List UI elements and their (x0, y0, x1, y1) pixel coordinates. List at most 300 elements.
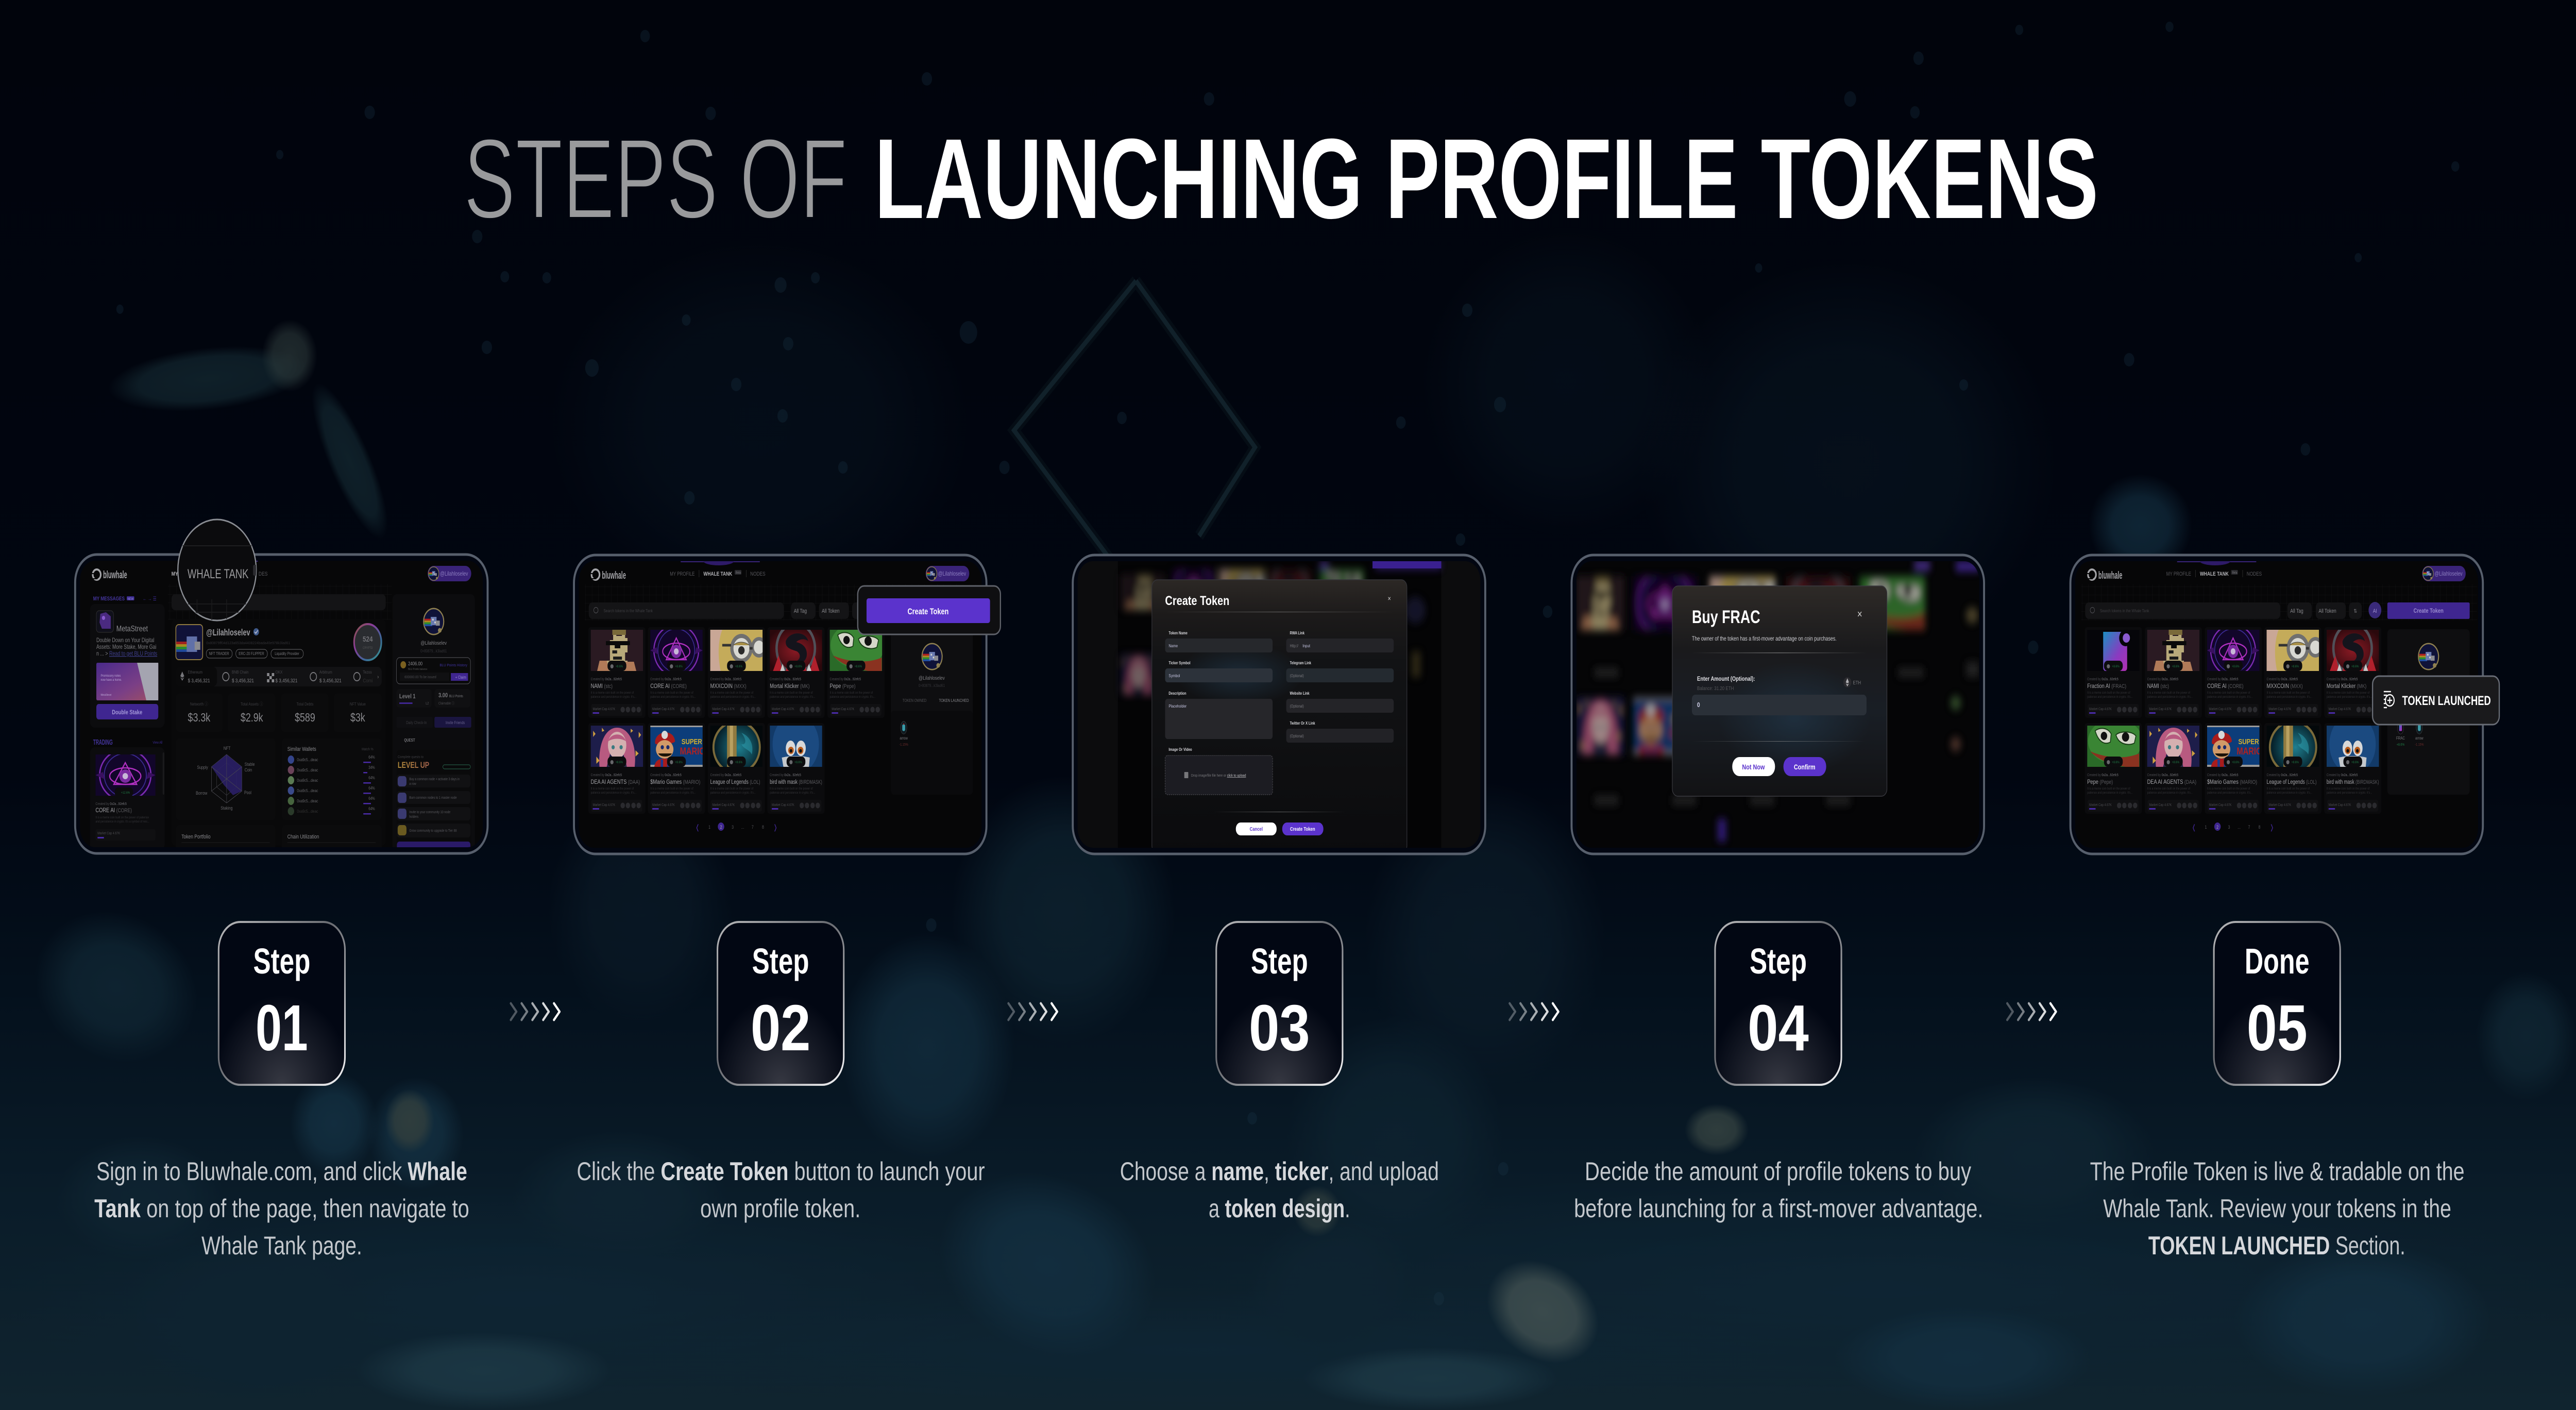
token cards: Created by 0x2a...92efc5 (2147, 677, 2179, 681)
token cards: patience and persistence in crypto. It's... (2207, 792, 2253, 795)
similar wallets list: 64% (368, 755, 375, 760)
token cards: Created by 0x2a...92efc5 (591, 677, 622, 681)
stat cards: Total Assets ⓘ (241, 701, 263, 707)
panel: step 4 screenshot (1571, 555, 1984, 854)
token cards: +8.6% (2172, 761, 2179, 764)
token cards: Market Cap 4.67K (832, 707, 855, 711)
right profile column: Daily Check-In (406, 720, 427, 725)
radar chart: Staking (221, 805, 233, 811)
token cards: It is a meme coin built on the power of (710, 692, 753, 695)
panel: step 3 screenshot (1073, 555, 1485, 854)
text: step 5 description: TOKEN LAUNCHED Section. (2148, 1231, 2405, 1260)
step badge 01 (218, 922, 345, 1085)
text: step 4 description: before launching for a first-mover advantage. (1574, 1194, 1983, 1223)
chain strip: $ 3,456,321 (188, 677, 210, 683)
messages sidebar: n ... > Read to get BLU Points (96, 651, 157, 657)
Create Token modal: Twitter Or X Link (1290, 721, 1315, 726)
token cards: +8.6% (2172, 665, 2179, 668)
profile pill: @Lilahloselev (2434, 571, 2463, 577)
right profile column: 0×80879...k3lad61 (420, 649, 447, 653)
portfolio and chain cards: Token Portfolio (181, 834, 211, 840)
navigation: MY PROFILE (670, 571, 695, 577)
radar chart: Coin (245, 767, 252, 773)
token cards: It is a meme coin built on the power of (2147, 787, 2190, 791)
profile card: @Lilahloselev (206, 627, 250, 637)
Create Token modal: Create Token (1165, 594, 1229, 608)
messages sidebar: Double Stake (112, 709, 142, 716)
token cards: It is a meme coin built on the power of (2147, 692, 2190, 695)
token cards: +8.6% (735, 761, 742, 764)
token cards: Market Cap 4.67K (2329, 803, 2351, 807)
token cards: patience and persistence in crypto. It's... (710, 792, 756, 795)
Buy FRAC modal: ETH (1853, 680, 1861, 685)
right profile column: Invite to your community 10 node (409, 810, 451, 814)
text: step 5 description (2090, 1157, 2465, 1260)
pagination: 3 (2228, 825, 2230, 830)
token cards: +8.6% (2232, 761, 2239, 764)
pagination: 1 (2205, 825, 2207, 830)
callout: Create Token button: Create Token (907, 607, 948, 616)
profile card: 0x80879ff04d123a653da4408224bada40e978k3lad61 (206, 641, 291, 645)
right profile column: 3.00 BLU Points (438, 692, 463, 699)
Create Token modal: Placeholder (1168, 703, 1187, 709)
Create Token modal: Input (1302, 643, 1311, 648)
right profile column: 2406.00 (408, 661, 422, 666)
token cards: Market Cap 4.67K (772, 707, 794, 711)
Create Token modal (1152, 580, 1407, 853)
stat cards: $2.9k (241, 711, 263, 725)
token cards: It is a meme coin built on the power of (770, 692, 813, 695)
step badge 01: Step (253, 941, 310, 982)
text: step 1 description: Sign in to Bluwhale.com, and click Whale (96, 1157, 467, 1186)
messages sidebar (90, 596, 165, 850)
messages sidebar: NEW (127, 598, 134, 601)
pagination (695, 822, 778, 832)
Create Token modal: Website Link (1290, 691, 1310, 696)
token cards: It is a meme coin built on the power of (2267, 692, 2310, 695)
token cards: League of Legends (LOL) (2267, 779, 2317, 785)
stat cards: $3k (350, 711, 365, 725)
Create Token modal: Token Name (1168, 631, 1188, 635)
token cards: It is a meme coin built on the power of (650, 692, 693, 695)
Create Token modal: Create Token (1290, 826, 1315, 832)
token cards: +8.6% (675, 665, 683, 668)
token cards: patience and persistence in crypto. It's... (2267, 696, 2312, 699)
token cards: Market Cap 4.67K (712, 707, 735, 711)
right profile column: 600000.00 To be issued (404, 675, 436, 679)
similar wallets list (282, 738, 382, 820)
token cards: +8.6% (616, 665, 623, 668)
diamond outline (1014, 281, 1255, 588)
step badge 02 (718, 922, 844, 1085)
token cards: Created by 0x2a...92efc5 (2267, 677, 2298, 681)
token cards: Created by 0x2a...92efc5 (830, 677, 861, 681)
step badge 05 done: 05 (2247, 992, 2308, 1064)
messages sidebar: Assets: More Stake, More Gai (96, 644, 156, 650)
pagination: 7 (2248, 825, 2250, 830)
radar chart: NFT (224, 746, 230, 751)
text: step 5 description: Whale Tank. Review your tokens in the (2103, 1194, 2451, 1223)
token cards: It is a meme coin built on the power of (710, 787, 753, 791)
chain strip: › (377, 674, 379, 680)
pagination: ❬ (695, 824, 700, 832)
pagination (2192, 822, 2274, 832)
token cards: +8.6% (2351, 761, 2359, 764)
stat cards: $589 (295, 711, 315, 725)
token cards (588, 623, 885, 814)
arrow: step 1 to 2 (511, 1003, 560, 1020)
similar wallets list: 64% (368, 786, 375, 791)
pagination: ❭ (773, 824, 778, 832)
navigation: Beta (2232, 572, 2237, 575)
token cards: Market Cap 4.67K (2329, 707, 2351, 711)
Buy FRAC modal: 0 (1697, 701, 1700, 709)
pagination: 3 (732, 825, 734, 830)
token cards: patience and persistence in crypto. It's... (591, 696, 636, 699)
Buy FRAC modal: Enter Amount (Optional): (1697, 676, 1755, 682)
token cards: patience and persistence in crypto. It's... (2147, 792, 2193, 795)
step badge 03 (1216, 922, 1343, 1085)
token cards: DEA AI AGENTS (DAA) (591, 779, 640, 785)
title: STEPS OF (464, 115, 848, 242)
navigation: NODES (750, 571, 766, 577)
Create Token modal: Image Or Video (1168, 747, 1192, 752)
similar wallets list: 0xa9c5...deac (297, 798, 318, 803)
chain strip: Tezos (363, 669, 372, 675)
profile pill (926, 566, 969, 581)
token cards: It is a meme coin built on the power of (2207, 787, 2250, 791)
step badge 02: Step (752, 941, 809, 982)
text: step 1 description: Tank on top of the page, then navigate to (94, 1194, 469, 1223)
token cards: +8.6% (855, 665, 862, 668)
token cards: +8.6% (2112, 665, 2120, 668)
Create Token modal: Name (1168, 643, 1178, 648)
profile card (172, 619, 386, 851)
blurred background screen (1577, 561, 1980, 842)
messages sidebar: MY MESSAGES (93, 596, 125, 602)
similar wallets list: 64% (368, 807, 375, 811)
token cards: Created by 0x2a...92efc5 (770, 677, 801, 681)
token cards: Created by 0x2a...92efc5 (650, 773, 682, 777)
bluwhale logo: bluwhale (2098, 569, 2123, 581)
token cards: It is a meme coin built on the power of (2327, 787, 2370, 791)
text: step 3 description: a token design. (1209, 1194, 1350, 1223)
navigation: WHALE TANK (2200, 571, 2229, 577)
Create Token modal: (Optional) (1290, 734, 1304, 738)
text: step 3 description: Choose a name, ticker, and upload (1120, 1157, 1439, 1186)
text: step 1 description: Whale Tank page. (201, 1231, 362, 1260)
radar chart: Borrow (196, 791, 207, 796)
profile card: Liquidity Provider (275, 651, 299, 656)
profile card: NFT TRADER (209, 651, 229, 656)
title: LAUNCHING PROFILE TOKENS (874, 115, 2098, 242)
Create Token modal: RWA Link (1290, 631, 1304, 635)
pagination: 2 (2216, 825, 2219, 830)
token cards: patience and persistence in crypto. It's... (770, 696, 816, 699)
text: step 2 description (577, 1157, 985, 1223)
token cards: Market Cap 4.67K (2209, 803, 2232, 807)
pagination: ... (2238, 825, 2241, 830)
bluwhale logo (591, 569, 626, 581)
bluwhale logo (2087, 569, 2123, 581)
arrow: step 2 to 3 (1008, 1003, 1057, 1020)
token cards (2085, 624, 2381, 814)
similar wallets list: 64% (368, 776, 375, 780)
Buy FRAC modal: Not Now (1742, 763, 1765, 771)
token cards: CORE AI (CORE) (650, 683, 687, 690)
token cards: Created by 0x2a...92efc5 (710, 677, 742, 681)
text: step 2 description: Click the Create Token button to launch your (577, 1157, 985, 1186)
token cards: +8.6% (794, 665, 802, 668)
token cards: Mortal Klicker (MK) (770, 683, 810, 690)
navigation (670, 570, 766, 577)
bluwhale logo (92, 569, 127, 580)
search and filters: All Tag (794, 608, 807, 614)
chain strip: $ 3,456,321 (319, 677, 342, 683)
token cards: patience and persistence in crypto. It's... (2087, 792, 2133, 795)
token cards: Created by 0x2a...92efc5 (650, 677, 682, 681)
text: step 2 description: own profile token. (700, 1194, 860, 1223)
token cards: Market Cap 4.67K (2149, 803, 2172, 807)
token cards: It is a meme coin built on the power of (2087, 692, 2130, 695)
search and filters: Search tokens in the Whale Tank (2100, 608, 2149, 613)
Create Token modal: Drop image/file file here or click to upload (1191, 774, 1246, 778)
search and filters: All Token (822, 608, 839, 614)
similar wallets list: 64% (368, 796, 375, 801)
chain strip: Comi (363, 677, 372, 683)
sidebar: TOKEN OWNED (903, 698, 926, 703)
right profile column: @Lilahloselev (420, 640, 447, 646)
right profile column: Burn common nodes to 1 master node (409, 796, 457, 800)
token cards: Created by 0x2a...92efc5 (2327, 773, 2358, 777)
token cards: Created by 0x2a...92efc5 (2087, 773, 2119, 777)
token cards: Created by 0x2a...92efc5 (710, 773, 742, 777)
token cards: bird with mask (BIRDMASK) (2327, 779, 2379, 785)
right profile column: Complete quests to (398, 755, 423, 759)
token cards: Created by 0x2a...92efc5 (2207, 773, 2239, 777)
callout: Create Token button (858, 586, 1001, 634)
similar wallets list: Similar Wallets (287, 746, 316, 752)
panel: step 5 screenshot (2071, 555, 2499, 854)
rank badge: 524 (363, 635, 373, 643)
step badge 01: 01 (256, 992, 308, 1064)
Create Token modal: Cancel (1250, 826, 1263, 832)
similar wallets list: 0xa9c5...deac (297, 767, 318, 773)
token cards: +8.6% (2112, 761, 2120, 764)
chain strip: BNB Chain (232, 669, 249, 675)
Create Token modal: Ticker Symbol (1168, 661, 1191, 665)
pagination: ... (741, 825, 744, 830)
search and filters: All Token (2318, 608, 2336, 614)
pagination: 1 (708, 825, 710, 830)
token cards: It is a meme coin built on the power of (2327, 692, 2370, 695)
sidebar: -1.15% (2415, 743, 2424, 747)
token cards: DEA AI AGENTS (DAA) (2147, 779, 2196, 785)
step badge 04: Step (1750, 941, 1807, 982)
text: step 3 description (1120, 1157, 1439, 1223)
stat cards: $3.3k (188, 711, 211, 725)
token cards: +8.6% (2292, 665, 2299, 668)
text: step 4 description (1574, 1157, 1983, 1223)
arrow: step 3 to 4 (1510, 1003, 1558, 1020)
messages sidebar: MetaStreet (101, 694, 112, 697)
similar wallets list: 0xa9c5...deac (297, 778, 318, 783)
token cards: Market Cap 4.67K (772, 803, 794, 807)
magnifier on Whale Tank nav item: WHALE TANK (188, 567, 249, 581)
panel: step 2 screenshot (574, 555, 1001, 854)
callout: Token Launched tab (2372, 676, 2499, 725)
token cards: patience and persistence in crypto. It's... (2087, 696, 2133, 699)
pagination: 2 (720, 825, 722, 830)
callout: Token Launched tab: TOKEN LAUNCHED (2402, 694, 2491, 708)
Create Token button (2387, 602, 2470, 619)
sidebar: 0×80879...k3lad61 (919, 683, 945, 688)
Buy FRAC modal (1672, 586, 1887, 796)
messages sidebar: View All (152, 741, 162, 745)
token cards: Market Cap 4.67K (593, 707, 616, 711)
token cards: It is a meme coin built on the power of (830, 692, 873, 695)
profile pill (2422, 566, 2466, 581)
Create Token modal: × (1387, 595, 1391, 602)
token cards: Market Cap 4.67K (2268, 803, 2292, 807)
step badge 04: 04 (1748, 992, 1809, 1064)
search and filters: All Tag (2290, 608, 2303, 614)
token cards: Created by 0x2a...92efc5 (770, 773, 801, 777)
sidebar: FRAC (2396, 736, 2405, 741)
rank badge: CRYPTO (363, 647, 372, 650)
profile pill (428, 566, 471, 581)
token cards: NAMI (stc) (591, 683, 613, 690)
navigation: MY PROFILE (2166, 571, 2191, 577)
sidebar: +8.6% (2397, 743, 2405, 747)
token cards: $Mario Games (MARIO) (650, 779, 700, 785)
chain strip: Ethereum (188, 669, 202, 675)
messages sidebar: It is a meme coin built on the power of patience (95, 816, 149, 819)
right profile column (393, 594, 475, 852)
messages sidebar: and persistence in crypto. It's a symbol of resi... (95, 820, 149, 824)
step badge 04 (1715, 922, 1841, 1085)
sidebar (891, 626, 973, 795)
similar wallets list: Match % (362, 747, 374, 751)
right profile column: Invite Friends (446, 720, 465, 725)
token cards: Pepe (Pepe) (2087, 779, 2113, 785)
messages sidebar: CORE AI (CORE) (95, 807, 132, 814)
Buy FRAC modal: Balance: 31.20 ETH (1697, 685, 1734, 691)
chain strip: $ 3,456,321 (232, 677, 254, 683)
token cards: Market Cap 4.67K (2089, 803, 2112, 807)
token cards: Created by 0x2a...92efc5 (591, 773, 622, 777)
token cards: MXXCOIN (MXX) (2267, 683, 2303, 690)
token cards: It is a meme coin built on the power of (2267, 787, 2310, 791)
right profile column: Buy a common node + activate 3 days in (409, 777, 460, 781)
right profile column: a row (409, 782, 416, 786)
token cards: +8.6% (735, 665, 742, 668)
token cards: Created by 0x2a...92efc5 (2207, 677, 2239, 681)
token cards: It is a meme coin built on the power of (2207, 692, 2250, 695)
right profile column: QUEST (404, 738, 415, 743)
token cards: patience and persistence in crypto. It's... (2327, 792, 2372, 795)
sidebar: -1.15% (899, 743, 908, 747)
profile pill: @Lilahloselev (440, 571, 468, 577)
text: step 1 description (94, 1157, 469, 1260)
stat cards: Total Debts (296, 701, 314, 707)
sidebar: @Lilahloselev (919, 675, 945, 681)
pagination: 7 (752, 825, 754, 830)
messages sidebar: Double Down on Your Digital (96, 637, 154, 644)
chain strip: $ 3,456,321 (276, 677, 297, 683)
messages sidebar: Promissory notes (101, 675, 121, 678)
messages sidebar: +12.6% (121, 792, 130, 795)
token cards: It is a meme coin built on the power of (2087, 787, 2130, 791)
right profile column: BLU Points History (439, 663, 468, 667)
pagination: ❬ (2192, 824, 2196, 832)
text: step 5 description: The Profile Token is live & tradable on the (2090, 1157, 2465, 1186)
navigation: Beta (736, 572, 741, 575)
chain strip (176, 667, 382, 686)
profile card: ERC-20 FLIPPER (239, 651, 264, 656)
Buy FRAC modal: × (1857, 608, 1862, 621)
navigation: WHALE TANK (703, 571, 732, 577)
token cards: It is a meme coin built on the power of (770, 787, 813, 791)
token cards: patience and persistence in crypto. It's... (650, 696, 696, 699)
search and filters: ⇅ (2354, 608, 2357, 614)
search and filters (589, 602, 865, 619)
token cards: Created by 0x2a...92efc5 (2087, 677, 2119, 681)
right profile column: Level 1 (399, 693, 416, 700)
Create Token modal: (Optional) (1290, 704, 1304, 709)
sidebar: arrow (2415, 736, 2424, 741)
token cards: patience and persistence in crypto. It's... (830, 696, 875, 699)
bluwhale logo: bluwhale (103, 569, 127, 580)
pagination: 8 (2259, 825, 2261, 830)
messages sidebar: Created by 0x2a...92efc5 (95, 802, 127, 806)
navigation (2166, 570, 2262, 577)
token cards: Market Cap 4.67K (652, 707, 675, 711)
search and filters (2085, 602, 2381, 619)
messages sidebar: TRADING (93, 738, 113, 746)
right profile column: Claimable ⓘ (438, 701, 455, 706)
token cards: bird with mask (BIRDMASK) (770, 779, 822, 785)
token cards: Market Cap 4.67K (2149, 707, 2172, 711)
sidebar (2387, 629, 2470, 795)
token cards: patience and persistence in crypto. It's... (2267, 792, 2312, 795)
step badge 03: 03 (1249, 992, 1310, 1064)
blurred background screen (1121, 561, 1442, 695)
sidebar: TOKEN LAUNCHED (939, 698, 969, 703)
messages sidebar: now have a home. (101, 679, 122, 682)
token cards: Market Cap 4.67K (593, 803, 616, 807)
search bar (172, 594, 386, 610)
token cards: patience and persistence in crypto. It's... (710, 696, 756, 699)
right profile column: L2 (426, 701, 429, 706)
Create Token modal: Symbol (1168, 673, 1180, 678)
token cards: Market Cap 4.67K (652, 803, 675, 807)
token cards: patience and persistence in crypto. It's... (770, 792, 816, 795)
token cards: Created by 0x2a...92efc5 (2267, 773, 2298, 777)
right profile column: BLU Points balance (408, 668, 428, 671)
search and filters: AI (2373, 608, 2377, 614)
step badge 05 done (2214, 922, 2340, 1085)
token cards: Created by 0x2a...92efc5 (2327, 677, 2358, 681)
token cards: It is a meme coin built on the power of (650, 787, 693, 791)
token cards: Fraction AI (FRAC) (2087, 683, 2126, 690)
stat cards: Networth ⓘ (190, 701, 208, 707)
token cards: League of Legends (LOL) (710, 779, 760, 785)
arrow: step 4 to 5 (2007, 1003, 2056, 1020)
portfolio and chain cards (176, 825, 382, 851)
chain strip: Arbitrum (319, 669, 332, 675)
token cards: Market Cap 4.67K (2089, 707, 2112, 711)
